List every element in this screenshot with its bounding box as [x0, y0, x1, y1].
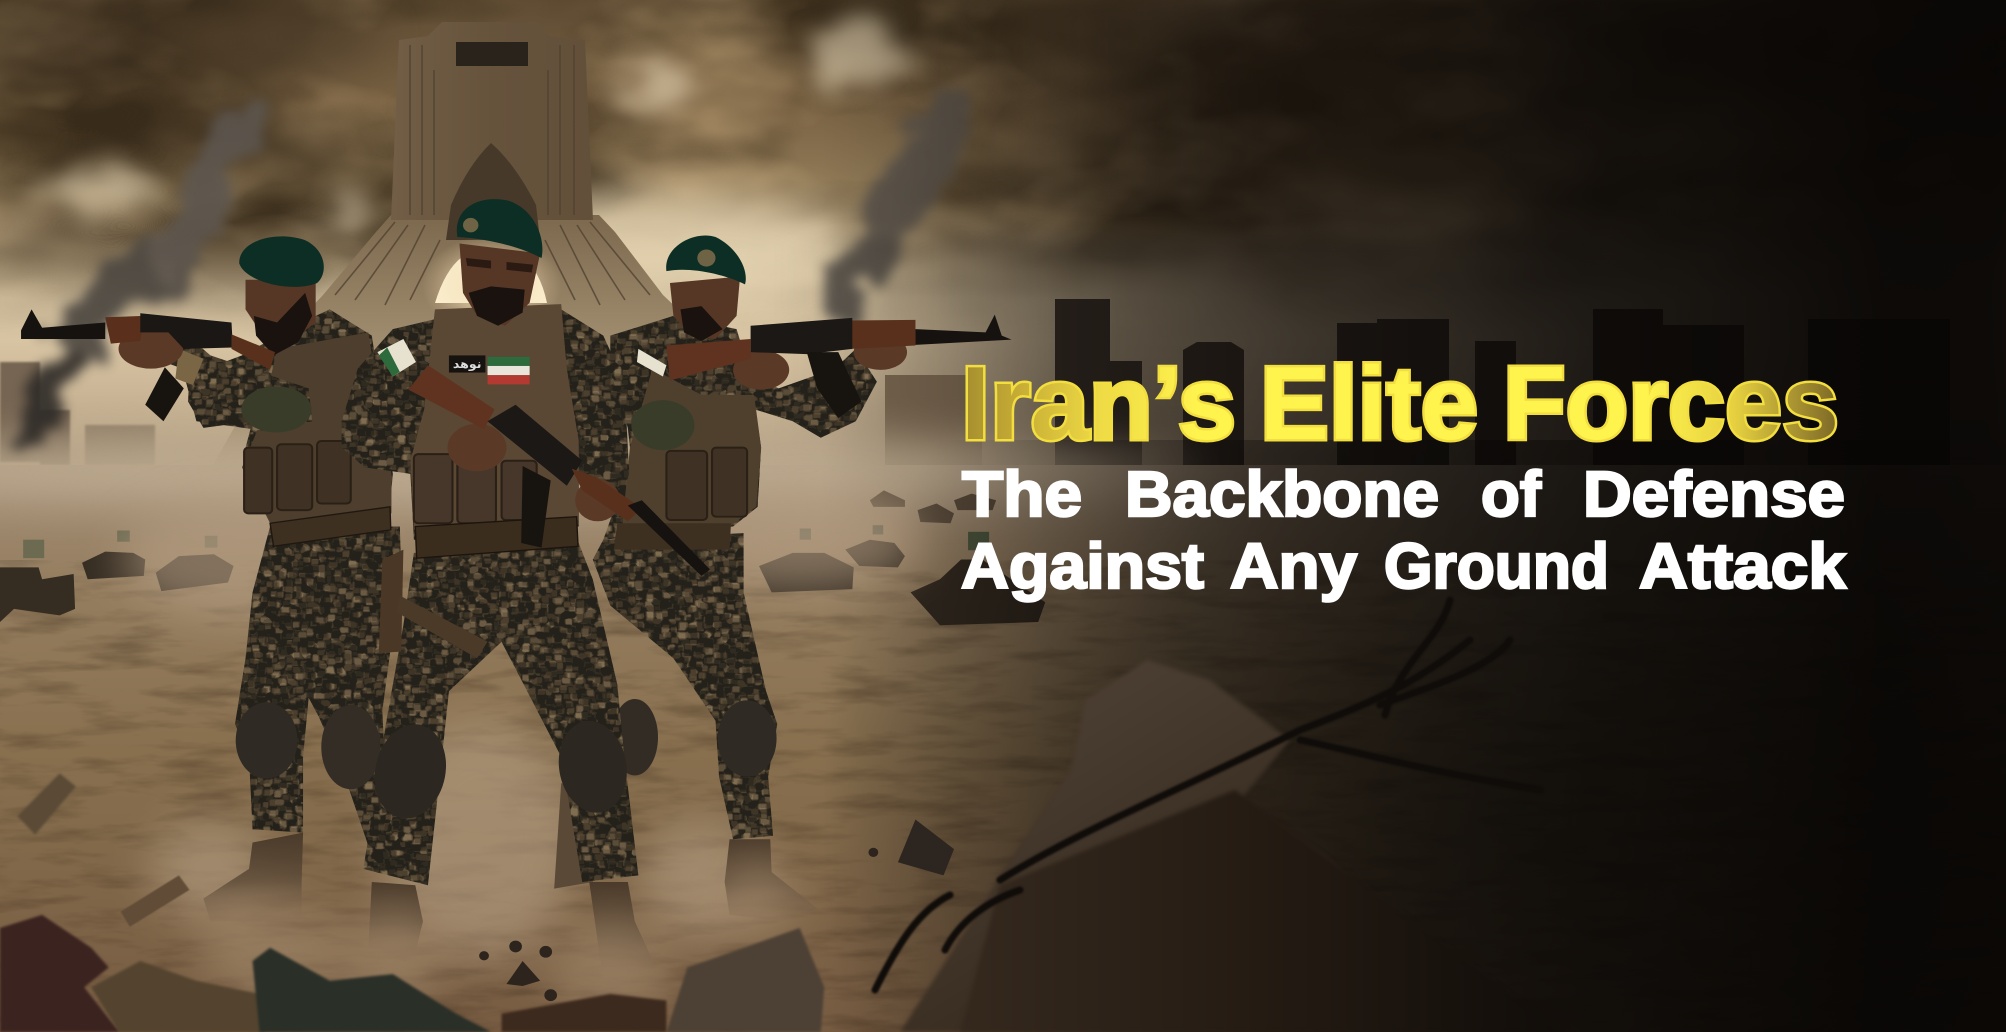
right rifle	[666, 315, 1012, 418]
ground dust over boots	[200, 860, 800, 1020]
title: Iran's Elite Forces: Elite	[1260, 346, 1478, 462]
subtitle: Against Any Ground Attack: Any	[1230, 530, 1357, 602]
center soldier	[342, 199, 710, 981]
subtitle: The Backbone of Defense: of	[1481, 458, 1542, 530]
distant city skyline, left	[0, 362, 155, 465]
name tag and flag patch: نوهد	[453, 357, 482, 371]
subtitle: The Backbone of Defense: Backbone	[1125, 458, 1439, 530]
dark branches	[875, 600, 1540, 990]
city skyline, right	[885, 299, 1950, 475]
subtitle: Against Any Ground Attack	[961, 530, 1846, 602]
desert ground	[0, 436, 2006, 1032]
center rifle	[408, 365, 710, 576]
subtitle: Against Any Ground Attack: Ground	[1384, 530, 1609, 602]
Azadi tower	[210, 22, 760, 470]
sky with clouds	[0, 0, 2006, 480]
title: Iran's Elite Forces: Iran’s	[961, 346, 1236, 462]
right tanks	[759, 490, 1045, 625]
subtitle: The Backbone of Defense: Defense	[1583, 458, 1845, 530]
name tag and flag patch	[449, 355, 530, 384]
dust around soldiers	[120, 490, 920, 960]
large foreground rocks	[900, 660, 1560, 1032]
subtitle: The Backbone of Defense	[962, 458, 1845, 530]
left rifle	[21, 309, 275, 421]
smoke plumes	[30, 115, 955, 440]
left soldier	[21, 236, 401, 921]
subtitle: Against Any Ground Attack: Against	[961, 530, 1204, 602]
foreground rubble	[0, 915, 824, 1032]
subtitle: The Backbone of Defense: The	[962, 458, 1082, 530]
flying debris and shell casings	[18, 773, 954, 1001]
left jeeps	[0, 531, 234, 622]
three soldiers	[21, 199, 1012, 981]
title: Iran's Elite Forces	[961, 346, 1839, 462]
title: Iran's Elite Forces: Forces	[1503, 346, 1839, 462]
subtitle: Against Any Ground Attack: Attack	[1639, 530, 1846, 602]
military vehicles	[0, 490, 1045, 625]
right soldier	[554, 235, 1012, 921]
right darkening overlay	[820, 0, 2006, 1032]
